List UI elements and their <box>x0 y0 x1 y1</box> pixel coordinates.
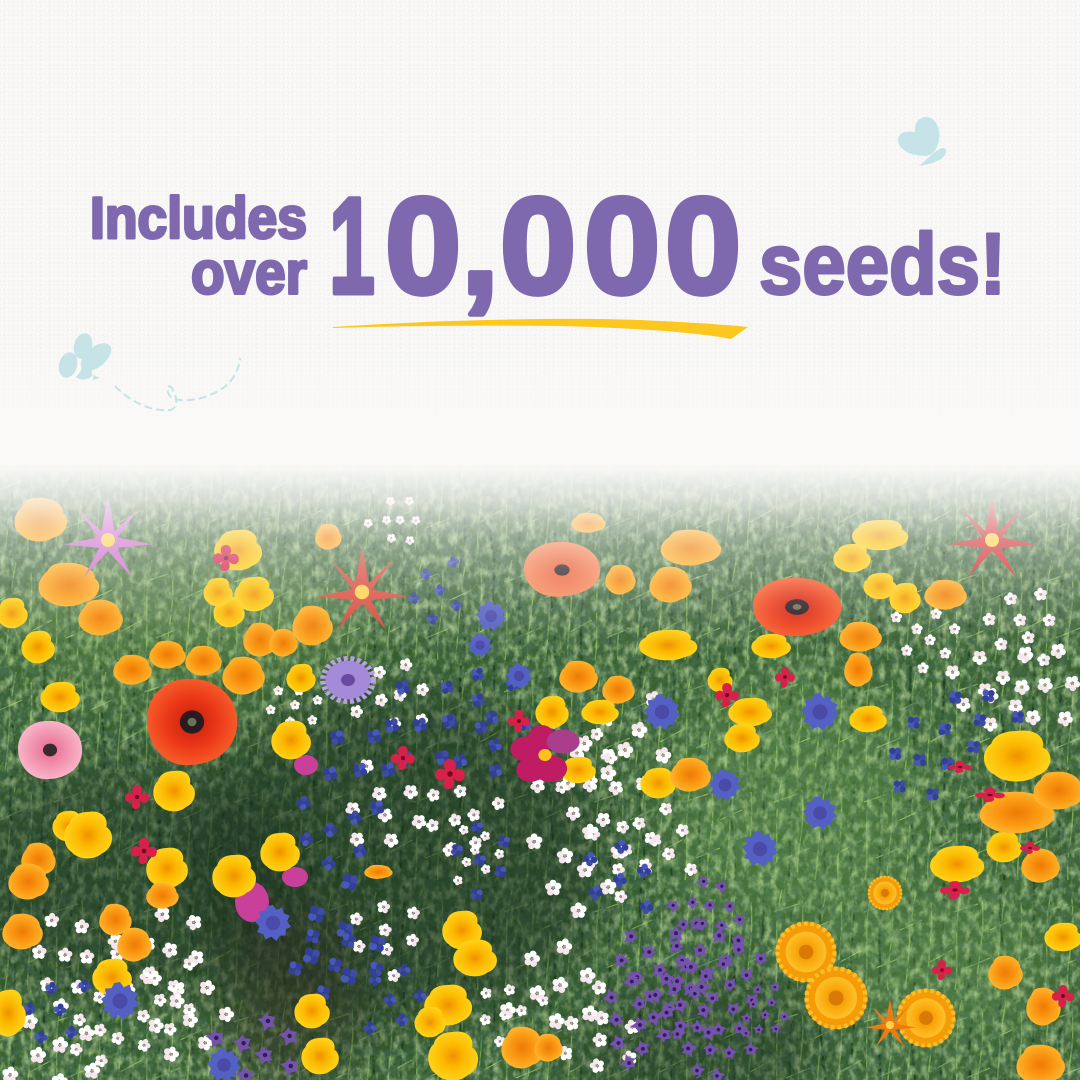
heading: 10,000: 0,000 <box>385 170 741 323</box>
purple aster <box>323 658 373 702</box>
heading: 10,000: 1 <box>329 170 375 323</box>
pink flower heads <box>235 755 318 922</box>
canvas fading to white <box>0 340 1080 441</box>
white fade over meadow <box>0 440 1080 650</box>
magenta flower <box>510 725 580 782</box>
heading: seeds!: seeds! <box>759 216 1006 312</box>
heading: includes over: over <box>191 240 307 306</box>
heading: includes over: Includes <box>90 186 307 251</box>
violet flower clusters <box>195 862 800 1080</box>
salmon poppy <box>524 542 600 597</box>
icon: bee <box>56 331 116 380</box>
panel: wildflower meadow <box>0 465 1080 1080</box>
pink poppy <box>18 721 82 779</box>
orange-red poppy <box>753 578 841 636</box>
small red flowers <box>125 545 1074 1007</box>
meadow grass <box>0 465 1080 1080</box>
heading: includes over <box>90 186 307 306</box>
icon: butterfly <box>898 117 946 166</box>
cornflowers <box>101 601 839 1080</box>
cosmos flowers <box>64 496 1036 630</box>
marigolds <box>776 876 955 1047</box>
large red poppy <box>147 679 237 765</box>
golden poppies <box>0 520 1080 1080</box>
white flower clusters <box>1 483 1080 1080</box>
orange poppies <box>2 498 1080 1080</box>
yellow underline swoosh <box>333 319 748 339</box>
blue flower clusters <box>18 555 1028 1051</box>
flight path: dashed loop <box>115 358 240 410</box>
